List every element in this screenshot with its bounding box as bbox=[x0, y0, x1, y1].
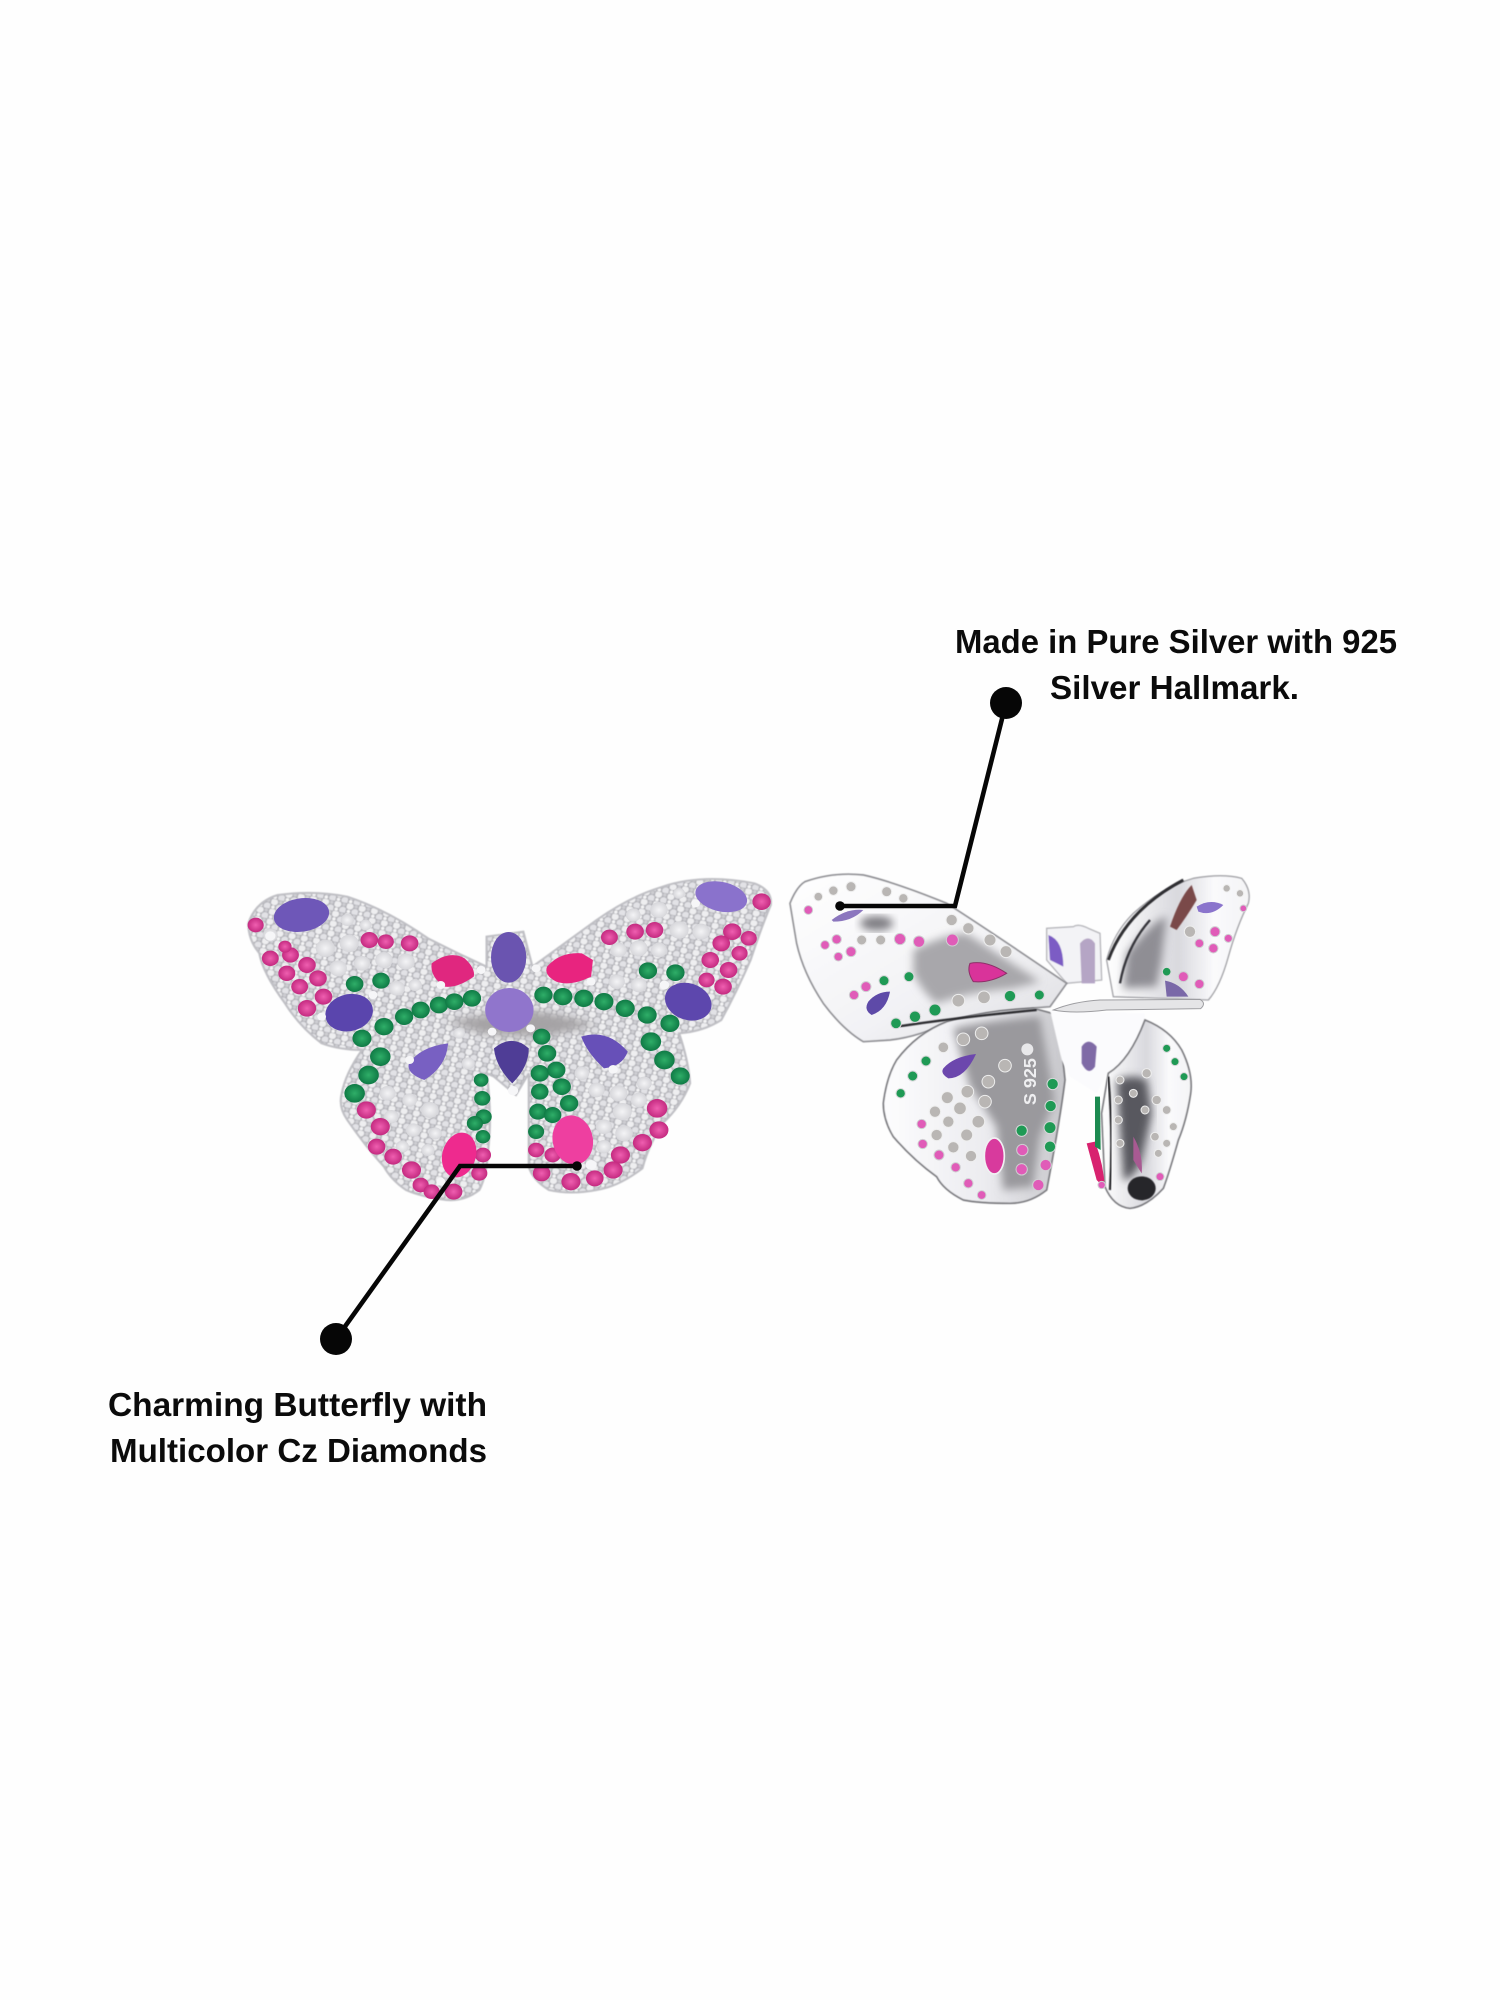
bail and purple stones behind clasp bbox=[1047, 925, 1102, 983]
dark seam between wings bbox=[897, 1010, 1037, 1027]
leader start dot front bbox=[320, 1323, 352, 1355]
callout: front butterfly bbox=[108, 1161, 582, 1469]
large purple gems bbox=[271, 876, 751, 1083]
upper left wing back bbox=[790, 874, 1067, 1042]
brown reflection bbox=[1170, 885, 1197, 930]
grey fold patch upper right bbox=[1123, 917, 1167, 988]
dark folds lower right bbox=[1117, 1077, 1152, 1180]
callout: silver hallmark bbox=[835, 623, 1397, 911]
label back: Silver Hallmark. bbox=[1050, 669, 1299, 706]
grey polished panel bbox=[953, 1017, 1055, 1190]
butterfly earring front view bbox=[248, 876, 771, 1200]
label back: Made in Pure Silver with 925 bbox=[955, 623, 1397, 660]
lower right wing back bbox=[1102, 1020, 1191, 1208]
leader end dot front bbox=[572, 1161, 582, 1171]
green stone settings bbox=[879, 967, 1188, 1152]
dark inner fold bbox=[1120, 920, 1150, 983]
dark grey body shadow bbox=[446, 1012, 597, 1037]
lower left wing back bbox=[883, 1008, 1065, 1203]
pink stone settings bbox=[804, 905, 1247, 1199]
leader line back bbox=[840, 703, 1006, 906]
label front bbox=[108, 1386, 487, 1469]
upper right wing back bbox=[1107, 876, 1249, 1000]
label back bbox=[955, 623, 1397, 706]
dark stone cluster at wing tip bbox=[1128, 1176, 1156, 1200]
leader line front bbox=[336, 1166, 577, 1339]
label front: Charming Butterfly with bbox=[108, 1386, 487, 1423]
pink stones bbox=[248, 893, 771, 1200]
folded pink gem bbox=[1087, 1097, 1105, 1188]
label front: Multicolor Cz Diamonds bbox=[110, 1432, 487, 1469]
upper wing shadow blob bbox=[860, 916, 893, 931]
white stone settings bbox=[814, 882, 1244, 1162]
fold line lower right bbox=[1108, 1077, 1111, 1190]
leader start dot back bbox=[990, 687, 1022, 719]
silver prongs bbox=[265, 899, 700, 1186]
silver shaded patch on upper wing bbox=[913, 933, 1040, 1003]
lower purple stone bbox=[1082, 1042, 1097, 1071]
leader end dot back bbox=[835, 901, 845, 911]
large gem settings bbox=[832, 902, 1223, 1174]
clasp bar bbox=[1053, 999, 1204, 1012]
large pink gems bbox=[431, 953, 597, 1180]
silver wing body bbox=[248, 879, 771, 1200]
center silver panel bbox=[1050, 1010, 1145, 1093]
silver hallmark stamp: S 925 bbox=[1020, 1058, 1040, 1105]
white pave stones bbox=[263, 888, 710, 1156]
green stone band bbox=[344, 962, 690, 1143]
butterfly earring back view bbox=[790, 874, 1249, 1208]
dark wing folds bbox=[1108, 880, 1183, 960]
